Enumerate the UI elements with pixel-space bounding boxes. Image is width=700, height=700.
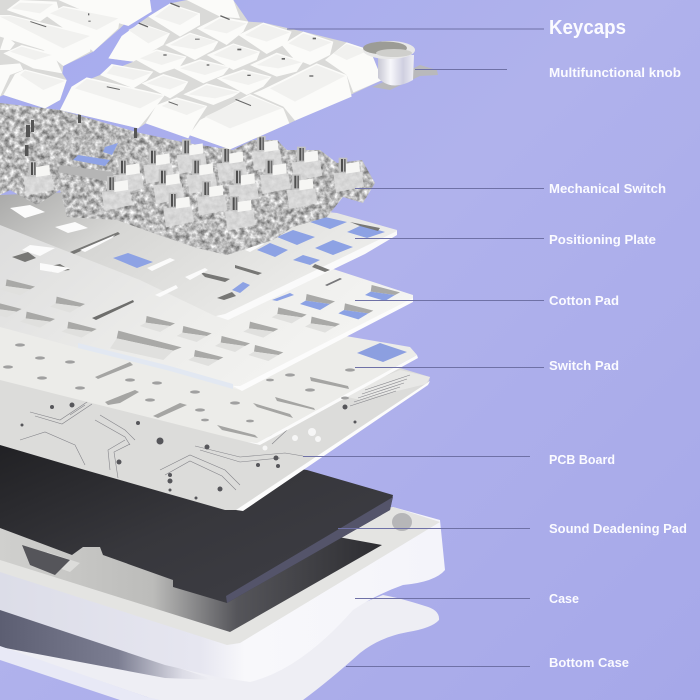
label: Multifunctional knob: Multifunctional knob <box>549 65 681 80</box>
icon: multifunctional knob <box>363 41 438 90</box>
label: Bottom Case: Bottom Case <box>549 655 629 670</box>
label: PCB Board: PCB Board <box>549 452 615 467</box>
switch pad slots <box>95 362 349 438</box>
keycap block shading <box>60 0 382 149</box>
cotton pad <box>0 215 413 391</box>
leader lines <box>287 29 544 666</box>
bottom case <box>0 595 439 700</box>
keycap legends <box>30 3 316 106</box>
label: Switch Pad: Switch Pad <box>549 358 619 373</box>
label: Sound Deadening Pad: Sound Deadening Pad <box>549 521 687 536</box>
sound deadening pad <box>0 430 393 603</box>
label: Case: Case <box>549 591 579 606</box>
cotton pad holes <box>0 279 400 366</box>
PCB board <box>0 340 430 511</box>
switch pad <box>0 300 418 445</box>
mechanical switches <box>0 103 375 255</box>
positioning plate <box>0 190 397 320</box>
switch tops <box>23 136 364 231</box>
case <box>0 507 445 682</box>
keycap top faces <box>0 3 368 128</box>
label: Keycaps: Keycaps <box>549 17 626 39</box>
PCB components <box>20 402 356 500</box>
keycaps <box>0 0 382 149</box>
label: Mechanical Switch: Mechanical Switch <box>549 181 666 196</box>
plate openings <box>113 217 385 301</box>
translucent switch housings <box>0 103 375 255</box>
label: Cotton Pad: Cotton Pad <box>549 293 619 308</box>
label: Positioning Plate: Positioning Plate <box>549 232 656 247</box>
PCB traces <box>20 375 410 490</box>
